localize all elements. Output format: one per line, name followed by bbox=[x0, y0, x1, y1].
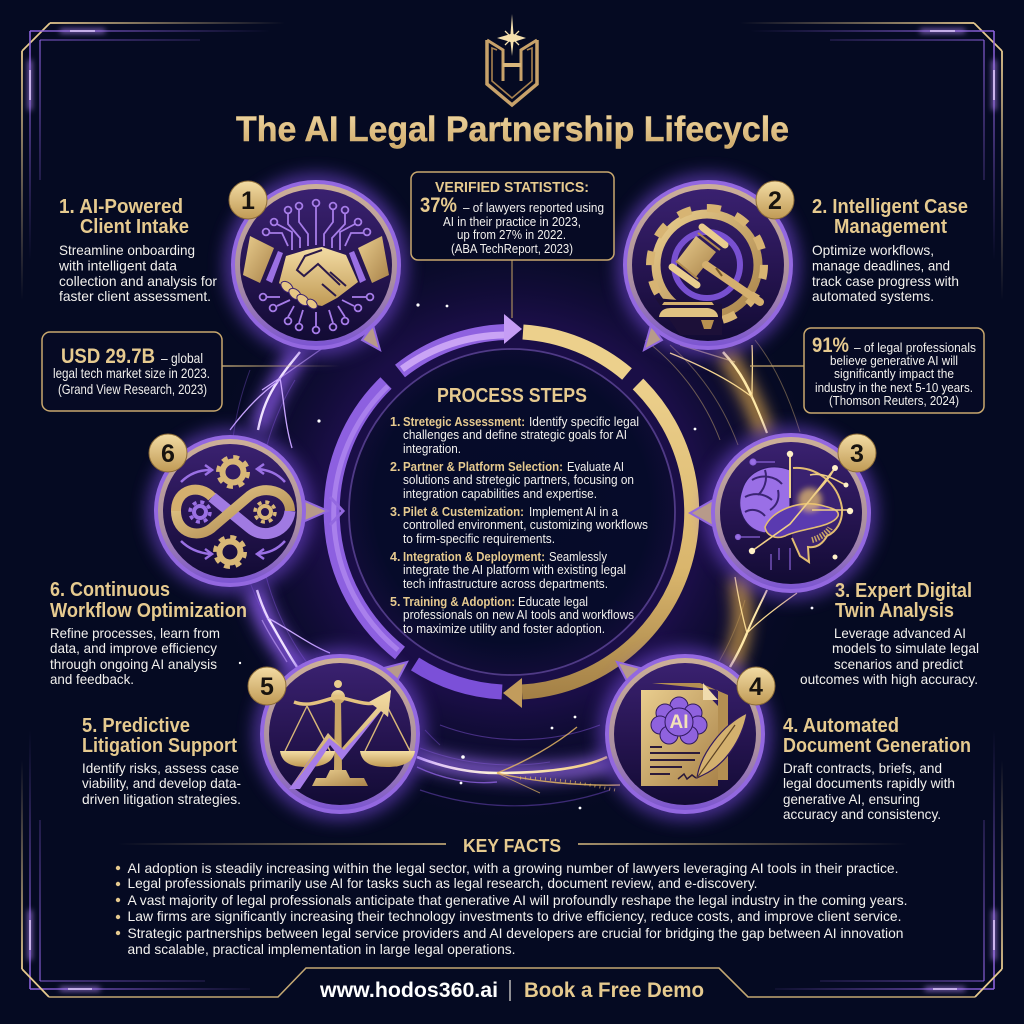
number badge 3: 3 bbox=[850, 440, 864, 468]
call to action: Book a Free Demo bbox=[524, 979, 704, 1002]
arc: bottom purple bbox=[415, 664, 502, 692]
callout: market size: USD 29.7B bbox=[61, 345, 155, 368]
callout: market size: (Grand View Research, 2023) bbox=[58, 381, 207, 397]
panel: step 3 text: scenarios and predict bbox=[834, 656, 963, 672]
panel: process steps: to firm-specific requirements. bbox=[403, 532, 555, 546]
number badge 5: 5 bbox=[260, 673, 274, 701]
panel: step 3 text: outcomes with high accuracy. bbox=[800, 671, 978, 687]
panel: process steps: 2. bbox=[390, 460, 400, 474]
panel: step 2 text: track case progress with bbox=[812, 273, 959, 289]
panel: process steps: controlled environment, customizing workflows bbox=[403, 518, 648, 532]
callout: verified statistics: up from 27% in 2022. bbox=[457, 227, 566, 242]
cycle ring arrows bbox=[332, 314, 692, 708]
panel: step 1 text: 1. AI-Powered bbox=[59, 196, 183, 218]
panel: process steps: challenges and define strategic goals for AI bbox=[403, 428, 627, 442]
panel: process steps: 1. bbox=[390, 415, 400, 429]
panel: step 6 text: data, and improve efficiency bbox=[50, 640, 217, 656]
number badge 5 bbox=[248, 667, 286, 705]
panel: key facts: A vast majority of legal professionals anticipate that generative AI will profoundly reshape the legal industry in the coming years. bbox=[128, 892, 908, 908]
central circle bbox=[349, 349, 675, 675]
number badge 4 bbox=[737, 667, 775, 705]
panel: process steps: integrate the AI platform with existing legal bbox=[403, 563, 626, 577]
arc: right gold bbox=[503, 384, 692, 708]
panel: key facts: and scalable, practical implementation in large legal operations. bbox=[128, 941, 516, 957]
number badge 2 bbox=[756, 181, 794, 219]
panel: step 6 text: Refine processes, learn from bbox=[50, 625, 220, 641]
step 1 badge circle bbox=[224, 173, 408, 357]
number badge 6 bbox=[149, 434, 187, 472]
logo bbox=[487, 14, 537, 105]
step 6 badge circle bbox=[147, 428, 343, 594]
icon: gear and gavel bbox=[650, 208, 764, 335]
panel: step 6 text: Workflow Optimization bbox=[50, 600, 247, 622]
number badge 4: 4 bbox=[749, 673, 763, 701]
panel: step 5 text: Identify risks, assess case bbox=[82, 760, 239, 776]
arc: top purple bbox=[400, 314, 522, 371]
callout: verified statistics bbox=[411, 172, 614, 260]
icon: handshake with circuits bbox=[243, 200, 389, 333]
panel: step 3 text: 3. Expert Digital bbox=[835, 580, 972, 602]
callout: market size bbox=[42, 332, 222, 411]
panel: process steps: 4. bbox=[390, 550, 400, 564]
panel: step 2 text: Management bbox=[834, 216, 947, 238]
number badge 2: 2 bbox=[768, 187, 782, 215]
panel: process steps: Seamlessly bbox=[549, 550, 608, 564]
panel: process steps: Implement AI in a bbox=[529, 505, 618, 519]
panel: process steps: to maximize utility and foster adoption. bbox=[403, 622, 605, 636]
callout: generative AI impact bbox=[804, 328, 984, 413]
panel: step 3 text: Leverage advanced AI bbox=[834, 625, 966, 641]
panel: key facts: Law firms are significantly increasing their technology investments to drive efficiency, reduce costs, and improve client service. bbox=[128, 908, 902, 924]
panel: step 3 text: models to simulate legal bbox=[832, 640, 979, 656]
panel: process steps: Evaluate AI bbox=[567, 460, 624, 474]
panel: step 5 text: 5. Predictive bbox=[82, 715, 190, 737]
panel: step 4 text: Draft contracts, briefs, and bbox=[783, 760, 942, 776]
number badge 1 bbox=[229, 181, 267, 219]
panel: step 2 text: manage deadlines, and bbox=[812, 258, 950, 274]
panel: step 6 text: through ongoing AI analysis bbox=[50, 656, 217, 672]
panel: step 6 text: 6. Continuous bbox=[50, 579, 170, 601]
callout: generative AI impact: 91% bbox=[812, 334, 849, 357]
panel: process steps: integration capabilities and expertise. bbox=[403, 487, 597, 501]
arc: top gold bbox=[523, 332, 627, 374]
icon: AI document and quill: AI bbox=[670, 712, 688, 733]
panel: step 6 text: and feedback. bbox=[50, 671, 134, 687]
energy streaks and orbit lines bbox=[230, 303, 813, 809]
panel: step 1 text bbox=[58, 196, 217, 304]
icon: AI document and quill bbox=[641, 683, 747, 786]
panel: process steps: Stretegic Assessment: bbox=[403, 415, 525, 429]
panel: key facts bbox=[116, 836, 908, 957]
step 3 badge circle bbox=[690, 426, 878, 600]
panel: process steps: Identify specific legal bbox=[529, 415, 639, 429]
panel: step 4 text: 4. Automated bbox=[783, 715, 899, 737]
step 5 badge circle bbox=[253, 647, 427, 821]
panel: process steps: 5. bbox=[390, 595, 400, 609]
callout: verified statistics: 37% bbox=[420, 194, 457, 217]
step 4 badge circle bbox=[598, 647, 772, 821]
call to action: www.hodos360.ai bbox=[319, 979, 498, 1002]
panel: process steps: integration. bbox=[403, 442, 461, 456]
callout: verified statistics: (ABA TechReport, 2023) bbox=[451, 241, 573, 256]
panel: process steps bbox=[390, 385, 648, 636]
callout: generative AI impact: (Thomson Reuters, 2024) bbox=[829, 393, 959, 408]
number badge 1: 1 bbox=[241, 187, 255, 215]
panel: key facts: KEY FACTS bbox=[463, 836, 561, 856]
panel: process steps: 3. bbox=[390, 505, 400, 519]
panel: key facts: Legal professionals primarily use AI for tasks such as legal research, document review, and e-discovery. bbox=[128, 875, 758, 891]
panel: step 4 text bbox=[783, 715, 971, 822]
panel: key facts: AI adoption is steadily increasing within the legal sector, with a growing number of lawyers leveraging AI tools in their practice. bbox=[128, 860, 898, 876]
panel: step 5 text: viability, and develop data- bbox=[82, 775, 241, 791]
panel: step 4 text: Document Generation bbox=[783, 735, 971, 757]
step 2 badge circle bbox=[616, 173, 800, 357]
panel: step 3 text bbox=[800, 580, 979, 687]
panel: step 5 text: driven litigation strategies. bbox=[82, 791, 241, 807]
callout: verified statistics: AI in their practice in 2023, bbox=[443, 214, 581, 229]
panel: step 1 text: with intelligent data bbox=[58, 258, 177, 274]
panel: step 3 text: Twin Analysis bbox=[835, 600, 954, 622]
panel: step 2 text bbox=[812, 196, 968, 304]
panel: step 5 text: Litigation Support bbox=[82, 735, 237, 757]
panel: process steps: Integration & Deployment: bbox=[403, 550, 545, 564]
icon: infinity loop with gears bbox=[176, 457, 290, 567]
arc: left purple bbox=[332, 383, 400, 653]
panel: key facts: Strategic partnerships between legal service providers and AI developers are crucial for bridging the gap between AI innovation bbox=[128, 925, 904, 941]
callout: generative AI impact: believe generative AI will bbox=[830, 353, 958, 368]
panel: step 4 text: legal documents rapidly with bbox=[783, 775, 955, 791]
panel: step 1 text: faster client assessment. bbox=[59, 288, 211, 304]
panel: step 2 text: automated systems. bbox=[812, 288, 934, 304]
panel: step 2 text: 2. Intelligent Case bbox=[812, 196, 968, 218]
call to action bbox=[319, 979, 704, 1002]
panel: step 2 text: Optimize workflows, bbox=[812, 242, 934, 258]
statistic connectors bbox=[222, 260, 804, 366]
number badge 6: 6 bbox=[161, 440, 175, 468]
icon: scales with rising arrow bbox=[280, 680, 415, 789]
callout: generative AI impact: industry in the next 5-10 years. bbox=[815, 380, 973, 395]
callout: market size: – global bbox=[161, 350, 203, 366]
panel: process steps: professionals on new AI tools and workflows bbox=[403, 608, 634, 622]
panel: process steps: solutions and stretegic partners, focusing on bbox=[403, 473, 634, 487]
callout: market size: legal tech market size in 2023. bbox=[53, 365, 210, 381]
callout: verified statistics: – of lawyers reported using bbox=[463, 200, 604, 215]
number badge 3 bbox=[838, 434, 876, 472]
icon: digital twin brain bbox=[736, 451, 853, 570]
panel: process steps: Training & Adoption: bbox=[403, 595, 515, 609]
panel: step 1 text: collection and analysis for bbox=[59, 273, 217, 289]
callout: verified statistics: VERIFIED STATISTICS: bbox=[435, 179, 589, 196]
panel: process steps: tech infrastructure across departments. bbox=[403, 577, 608, 591]
panel: step 1 text: Streamline onboarding bbox=[59, 242, 195, 258]
panel: process steps: Pilet & Custemization: bbox=[403, 505, 524, 519]
panel: step 5 text bbox=[82, 715, 241, 807]
callout: generative AI impact: significantly impact the bbox=[834, 366, 954, 381]
panel: step 1 text: Client Intake bbox=[80, 216, 189, 238]
panel: step 4 text: accuracy and consistency. bbox=[783, 806, 941, 822]
title: The AI Legal Partnership Lifecycle bbox=[236, 110, 789, 149]
panel: step 4 text: generative AI, ensuring bbox=[783, 791, 920, 807]
panel: process steps: Partner & Platform Selection: bbox=[403, 460, 563, 474]
panel: process steps: Educate legal bbox=[518, 595, 588, 609]
panel: step 6 text bbox=[50, 579, 247, 687]
callout: generative AI impact: – of legal professionals bbox=[854, 340, 976, 355]
panel: process steps: PROCESS STEPS bbox=[437, 385, 587, 407]
